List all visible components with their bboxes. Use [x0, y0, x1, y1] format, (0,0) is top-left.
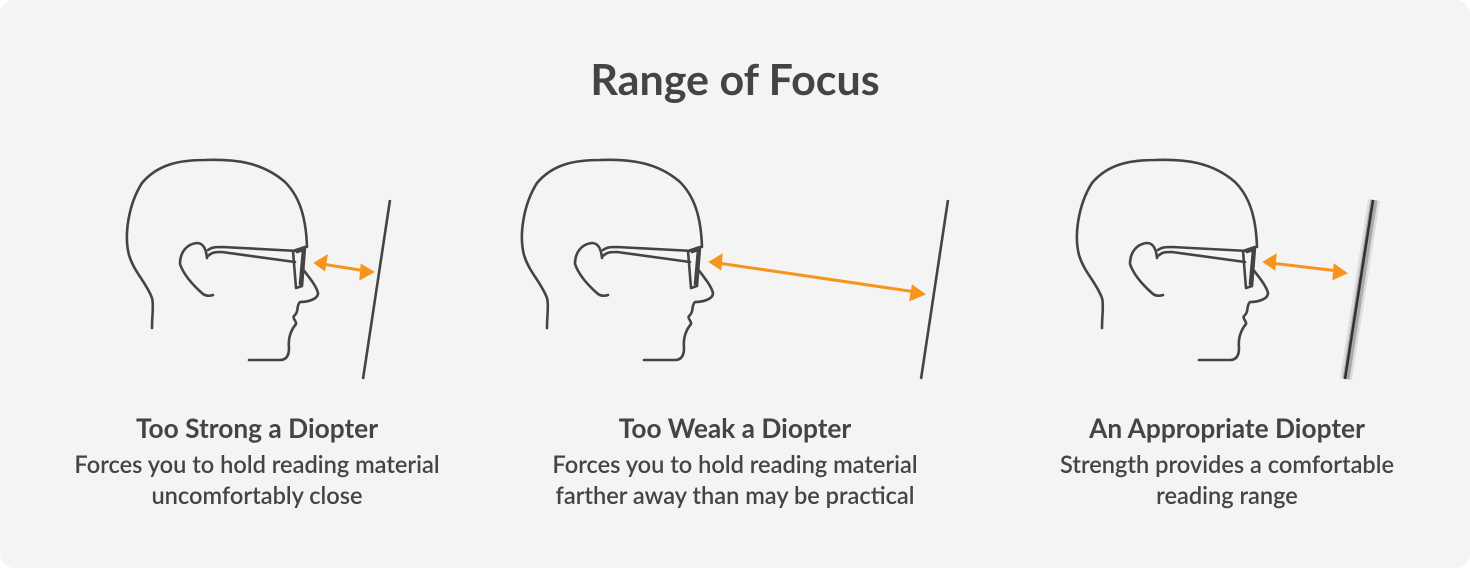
- title: Range of Focus: [590, 54, 880, 105]
- caption: too weak: farther away than may be practical: [556, 482, 914, 510]
- caption: appropriate: Strength provides a comfortable: [1060, 451, 1394, 479]
- head 2: [522, 160, 713, 360]
- caption: too strong: uncomfortably close: [151, 482, 363, 510]
- head 1: [127, 160, 318, 360]
- panel: too strong: [127, 160, 390, 379]
- caption: appropriate: reading range: [1156, 482, 1298, 510]
- caption: appropriate: An Appropriate Diopter: [1089, 412, 1365, 444]
- caption: too strong: Too Strong a Diopter: [136, 412, 378, 444]
- caption: too weak: Forces you to hold reading material: [552, 451, 918, 479]
- caption: too weak: [552, 412, 918, 510]
- caption: appropriate: [1060, 412, 1394, 510]
- caption: too strong: [74, 412, 440, 510]
- reading line 2: [921, 200, 948, 379]
- panel: appropriate: [1077, 160, 1374, 379]
- panel: too weak: [522, 160, 948, 379]
- arrow 2: [711, 256, 923, 299]
- arrow 1: [316, 257, 372, 278]
- reading line 3 (blurred range): [1345, 200, 1374, 379]
- reading line 1: [363, 200, 390, 379]
- caption: too weak: Too Weak a Diopter: [619, 412, 851, 444]
- caption: too strong: Forces you to hold reading material: [74, 451, 440, 479]
- head 3: [1077, 160, 1268, 360]
- arrow 3: [1265, 256, 1345, 278]
